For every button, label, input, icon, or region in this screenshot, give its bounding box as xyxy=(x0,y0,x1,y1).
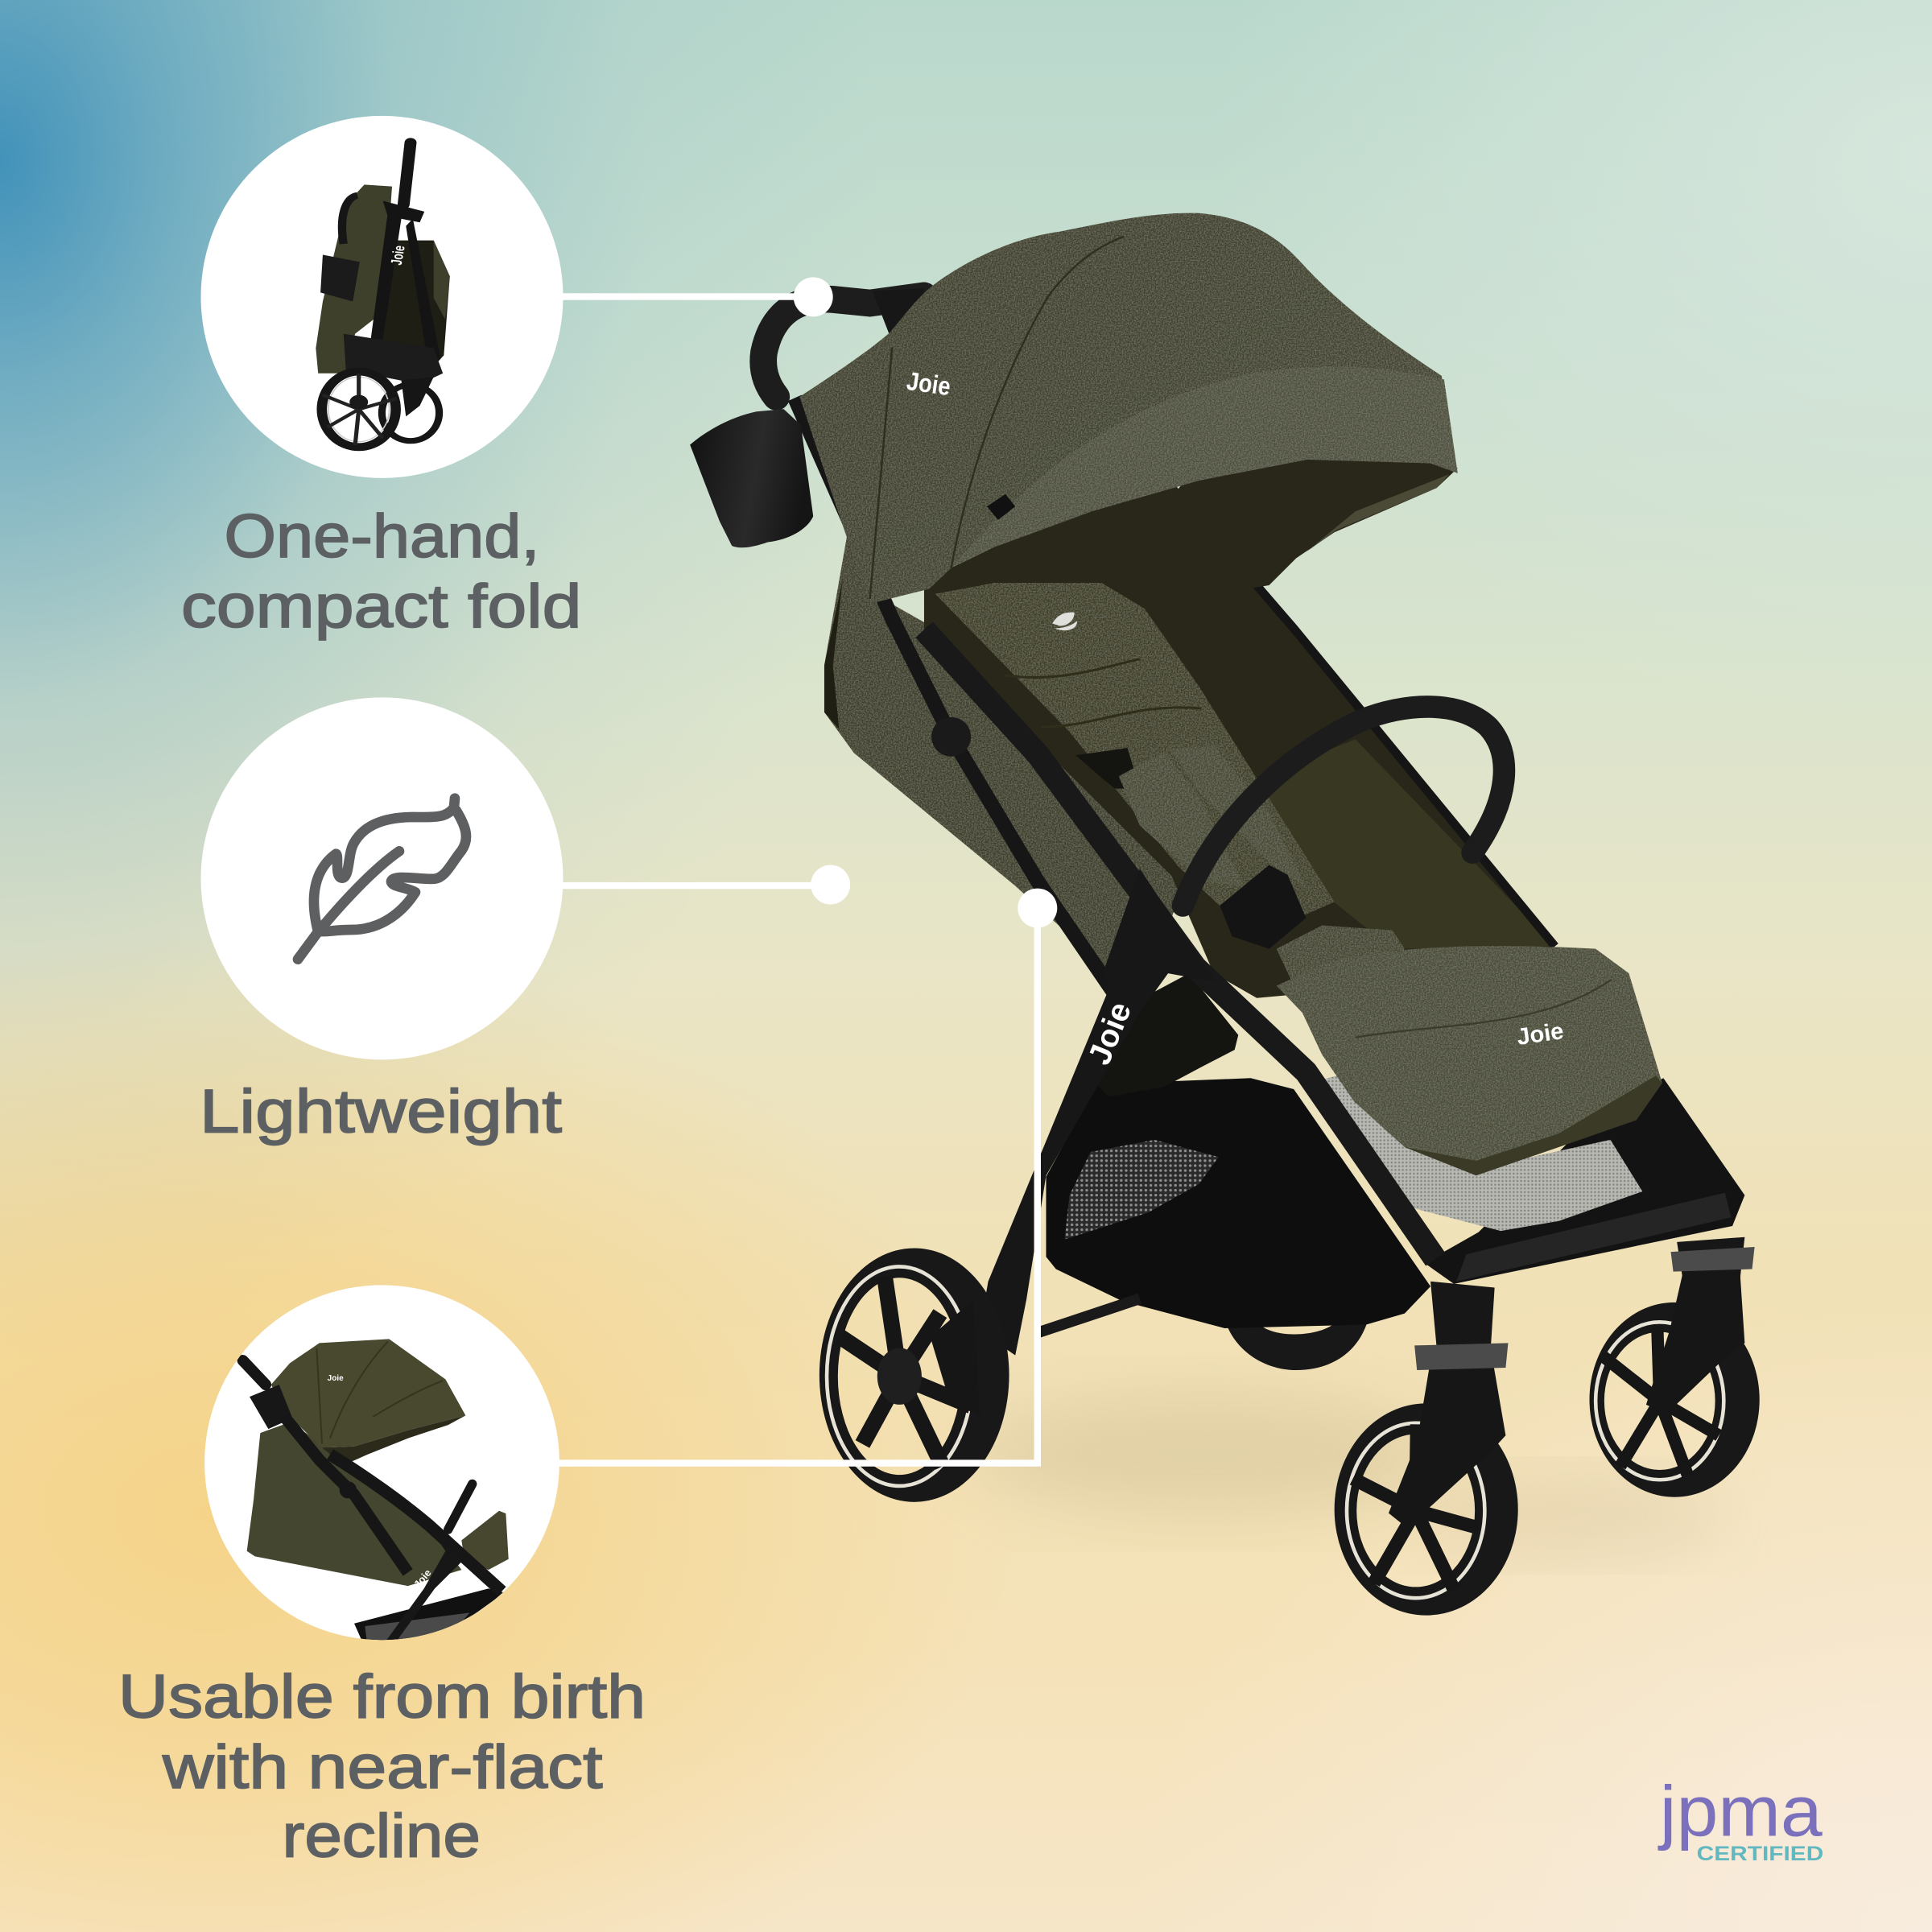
connector dot xyxy=(811,865,850,904)
infographic canvas xyxy=(122,116,1823,1860)
icon: reclined stroller: Joie xyxy=(328,1374,344,1383)
canopy seams xyxy=(870,237,1124,599)
rear wheel xyxy=(819,1249,1009,1502)
callout: one-hand fold xyxy=(181,116,833,641)
front right stem xyxy=(1677,1237,1744,1282)
front right collar xyxy=(1671,1247,1755,1272)
right frame rail xyxy=(1232,557,1555,947)
seat pad liner xyxy=(935,583,1335,938)
canopy outer xyxy=(799,213,1458,604)
canopy label tag xyxy=(987,494,1015,520)
connector line xyxy=(562,882,833,889)
icon: feather xyxy=(298,799,466,960)
connector dot xyxy=(794,277,833,316)
under-seat basket xyxy=(1046,1078,1430,1328)
floor shadow xyxy=(973,1393,1725,1553)
icon: folded stroller: Joie xyxy=(388,245,409,266)
footrest seam xyxy=(1356,980,1612,1038)
frame knob xyxy=(931,717,971,757)
brand mark on frame: Joie xyxy=(1082,997,1138,1070)
dark backrest xyxy=(924,487,1555,998)
front chassis tray xyxy=(1424,1078,1744,1284)
front right wheel xyxy=(1589,1302,1760,1497)
callout: usable from birth xyxy=(118,889,1057,1871)
rear fabric inner fold xyxy=(824,579,843,729)
label: One-hand, xyxy=(225,502,539,571)
harness buckle xyxy=(1220,865,1306,949)
callout: lightweight xyxy=(200,697,850,1146)
basket mesh window xyxy=(1064,1140,1219,1240)
label: recline xyxy=(283,1802,481,1871)
label: with near-flact xyxy=(162,1733,602,1802)
icon: reclined stroller xyxy=(243,1339,509,1648)
front stem xyxy=(1430,1282,1495,1348)
label: Usable from birth xyxy=(118,1663,646,1732)
grey mesh under footrest xyxy=(1309,1073,1642,1231)
label: Lightweight xyxy=(200,1078,562,1146)
front collar xyxy=(1414,1343,1508,1370)
white circle xyxy=(200,697,563,1059)
heart logo xyxy=(1052,613,1077,630)
push handle xyxy=(763,295,924,397)
connector elbow line xyxy=(558,908,1038,1463)
rear right wheel xyxy=(1226,1321,1368,1370)
left shoulder pad xyxy=(1119,752,1245,887)
under-seat crossbar xyxy=(1084,973,1238,1096)
rear seat fabric xyxy=(824,518,1183,1004)
cup holder xyxy=(690,409,813,547)
white circle xyxy=(200,116,563,478)
JPMA certified logo: jpma xyxy=(1657,1772,1823,1852)
canopy logo: Joie xyxy=(905,367,952,402)
label: compact fold xyxy=(181,572,581,641)
canopy interior lighter stripe xyxy=(1306,474,1449,552)
crotch strap pad xyxy=(1277,925,1405,985)
label xyxy=(181,502,581,641)
front right fork xyxy=(1646,1269,1744,1414)
canopy visor band xyxy=(952,366,1458,568)
connector dot xyxy=(1018,889,1057,928)
main stroller product photo xyxy=(690,213,1760,1616)
connector line xyxy=(562,293,813,300)
front left fork xyxy=(1389,1364,1505,1528)
seat tube and chassis xyxy=(924,630,1435,1259)
harness slot xyxy=(1075,748,1140,789)
icon: folded stroller xyxy=(316,142,450,447)
liner stitch xyxy=(1004,659,1201,727)
canopy interior xyxy=(1170,444,1458,589)
label xyxy=(118,1663,646,1871)
footrest logo: Joie xyxy=(1515,1018,1565,1051)
footrest xyxy=(1277,946,1662,1175)
main frame joint and rear leg xyxy=(980,869,1216,1356)
armrest bumper bar xyxy=(1183,707,1504,906)
rear axle xyxy=(1036,1298,1140,1333)
front left wheel xyxy=(1335,1403,1518,1616)
icon: reclined stroller: Joie xyxy=(412,1567,434,1590)
white circle xyxy=(204,1285,559,1640)
right shoulder pad xyxy=(1170,745,1306,887)
frame tube upper xyxy=(795,398,1117,998)
JPMA certified logo: CERTIFIED xyxy=(1697,1843,1823,1865)
